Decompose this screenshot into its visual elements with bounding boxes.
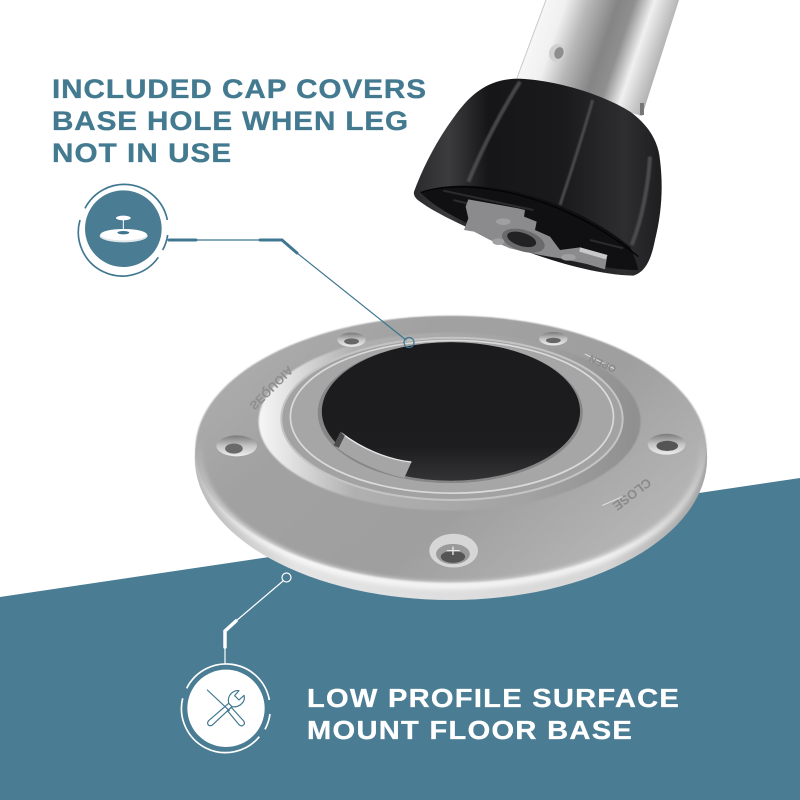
- bolt front: [429, 534, 478, 568]
- bolt top left: [337, 333, 366, 347]
- bolt right: [648, 434, 686, 455]
- leader line from base to wrench icon: [225, 573, 291, 663]
- floor base flange: [195, 316, 707, 600]
- caption: low profile surface mount floor base: LOW PROFILE SURFACE: [307, 683, 679, 713]
- title: included cap covers base hole: [52, 74, 426, 168]
- base rim: [195, 316, 707, 600]
- caption: low profile surface mount floor base: MOUNT FLOOR BASE: [307, 715, 632, 745]
- base top face: [195, 316, 706, 583]
- icon: cap on base in teal circle: [78, 184, 168, 276]
- title: included cap covers base hole: NOT IN USE: [52, 138, 231, 168]
- engraved label: open: [585, 354, 615, 369]
- floor base flange: OPEN: [588, 352, 618, 374]
- tools: [207, 690, 244, 726]
- mounting plate: [464, 199, 607, 269]
- bolt top right: [539, 332, 568, 345]
- caption: low profile surface mount floor base: [307, 683, 679, 745]
- engraved label: close: CLOSE: [610, 475, 654, 514]
- foot underside opening: [421, 186, 638, 270]
- engraved label: brand: SEQUOIA: [246, 363, 296, 413]
- metal leg tube: [517, 0, 679, 116]
- bolt left: [216, 435, 257, 456]
- leader line from cap icon to cap: [169, 240, 414, 348]
- title: included cap covers base hole: BASE HOLE WHEN LEG: [52, 106, 408, 136]
- icon: wrench and screwdriver in white circle: [181, 664, 270, 753]
- bright front edge highlight: [199, 318, 703, 586]
- black leg foot with mounting plate: [414, 79, 662, 276]
- title: included cap covers base hole: INCLUDED CAP COVERS: [52, 74, 426, 104]
- black blanking cap: [322, 342, 580, 481]
- raised ring: [259, 333, 641, 510]
- teal diagonal background band: [0, 478, 800, 800]
